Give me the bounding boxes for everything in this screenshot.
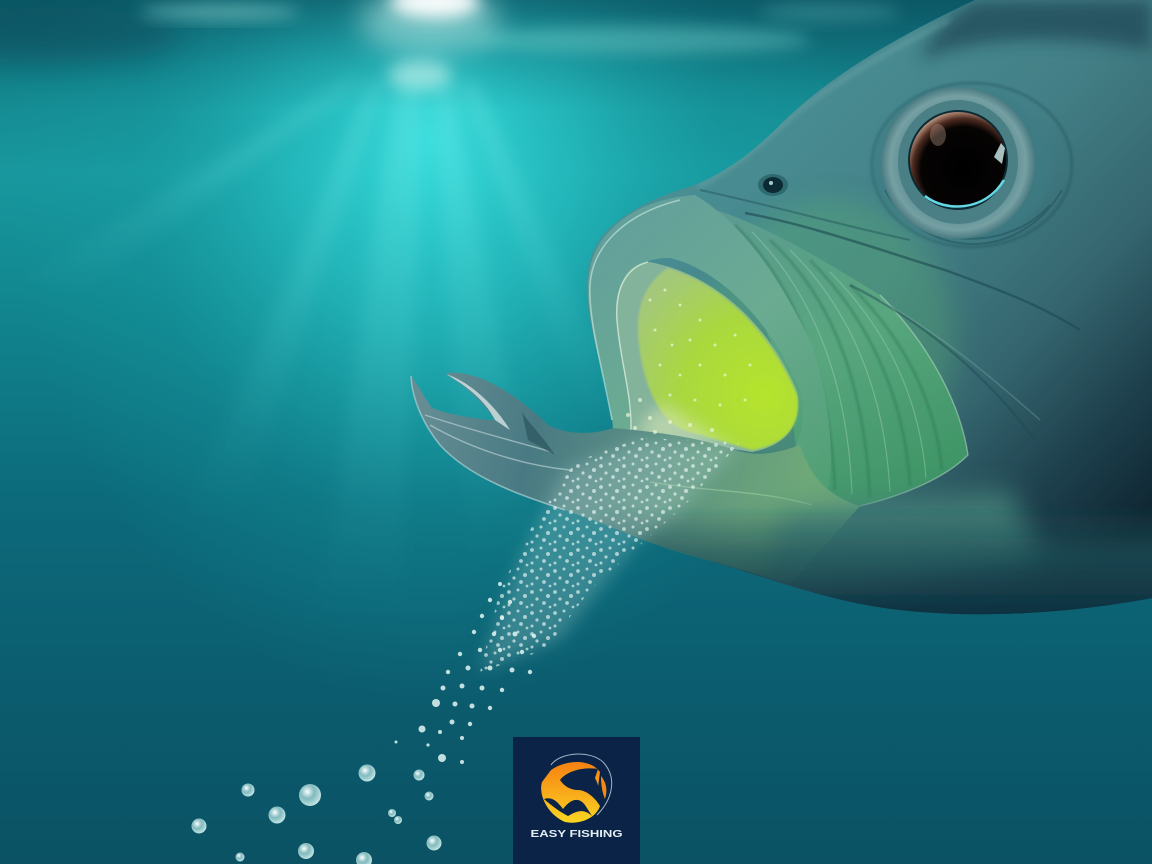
- upper lip: [588, 195, 831, 500]
- logo panel: Easy Fishing: [513, 737, 640, 864]
- logo disc with fish silhouette: [541, 754, 612, 823]
- highlight on head ridge: [698, 20, 950, 186]
- cheek fold flap: [700, 205, 968, 506]
- stream haze: [480, 440, 740, 670]
- glowing throat: [638, 268, 798, 450]
- green glow on cheek: [716, 203, 960, 454]
- fish: [411, 0, 1152, 625]
- scattered bubbles: [394, 582, 536, 764]
- bubble stream: [192, 438, 740, 864]
- large bubbles: [192, 764, 442, 864]
- light rays: [20, 80, 630, 620]
- belly shading: [600, 490, 1152, 625]
- lower jaw: [411, 373, 860, 584]
- bubbles inside mouth: [626, 288, 752, 434]
- nostril: [758, 174, 788, 196]
- eye: [872, 83, 1072, 247]
- mouth interior wall: [616, 262, 798, 452]
- brand name: EASY FISHING: [530, 828, 622, 840]
- dense bubbles pattern: [480, 438, 740, 672]
- body wrinkles: [745, 213, 1080, 330]
- dark back shading: [920, 0, 1152, 60]
- mouth rim highlights: [590, 200, 680, 420]
- fish body: [411, 0, 1152, 614]
